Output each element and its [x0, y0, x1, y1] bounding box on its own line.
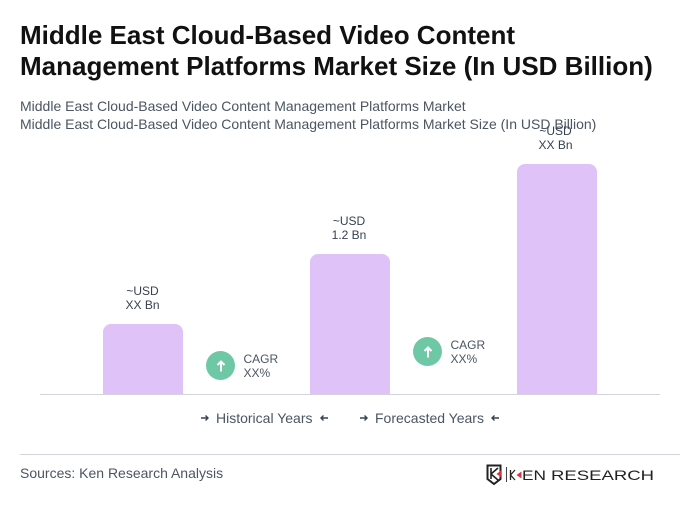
bar label: historical: XX Bn	[125, 298, 160, 312]
bar label: historical	[125, 284, 160, 312]
logo shield mark	[488, 466, 506, 484]
bar label: forecast	[538, 124, 573, 152]
logo wordmark: RESEARCH	[551, 467, 654, 483]
logo wordmark: EN	[522, 467, 546, 483]
legend: historical years: Historical Years	[216, 410, 312, 426]
CAGR text: XX%	[244, 366, 270, 380]
logo wordmark	[510, 467, 654, 483]
icon: up arrow	[206, 351, 235, 380]
bar label: forecast: ~USD	[539, 124, 572, 138]
CAGR text	[450, 338, 485, 366]
title: Management Platforms Market Size (In USD Billion)	[20, 51, 653, 81]
CAGR text	[244, 352, 278, 380]
title	[20, 20, 653, 81]
bar label: middle year: ~USD	[333, 214, 365, 228]
subtitle: Middle East Cloud-Based Video Content Management Platforms Market Size (In USD Billion)	[20, 116, 596, 132]
bar label: middle year: 1.2 Bn	[332, 228, 366, 242]
CAGR text: CAGR	[244, 352, 278, 366]
title: Middle East Cloud-Based Video Content	[20, 20, 515, 50]
bar label: historical: ~USD	[126, 284, 159, 298]
bar: forecast	[517, 164, 597, 394]
logo: Ken Research	[486, 464, 654, 486]
bar: historical	[103, 324, 183, 394]
CAGR badge: historical	[206, 351, 278, 380]
legend: forecasted years: Forecasted Years	[375, 410, 484, 426]
bar label: forecast: XX Bn	[538, 138, 573, 152]
subtitle: Middle East Cloud-Based Video Content Management Platforms Market	[20, 98, 466, 114]
bar: middle year	[310, 254, 390, 394]
subtitle	[20, 98, 596, 132]
icon: up arrow	[413, 337, 442, 366]
CAGR badge: forecast	[413, 337, 485, 366]
CAGR text: XX%	[450, 352, 477, 366]
bar label: middle year	[332, 214, 366, 242]
CAGR text: CAGR	[450, 338, 485, 352]
sources note: Sources: Ken Research Analysis	[20, 465, 223, 481]
